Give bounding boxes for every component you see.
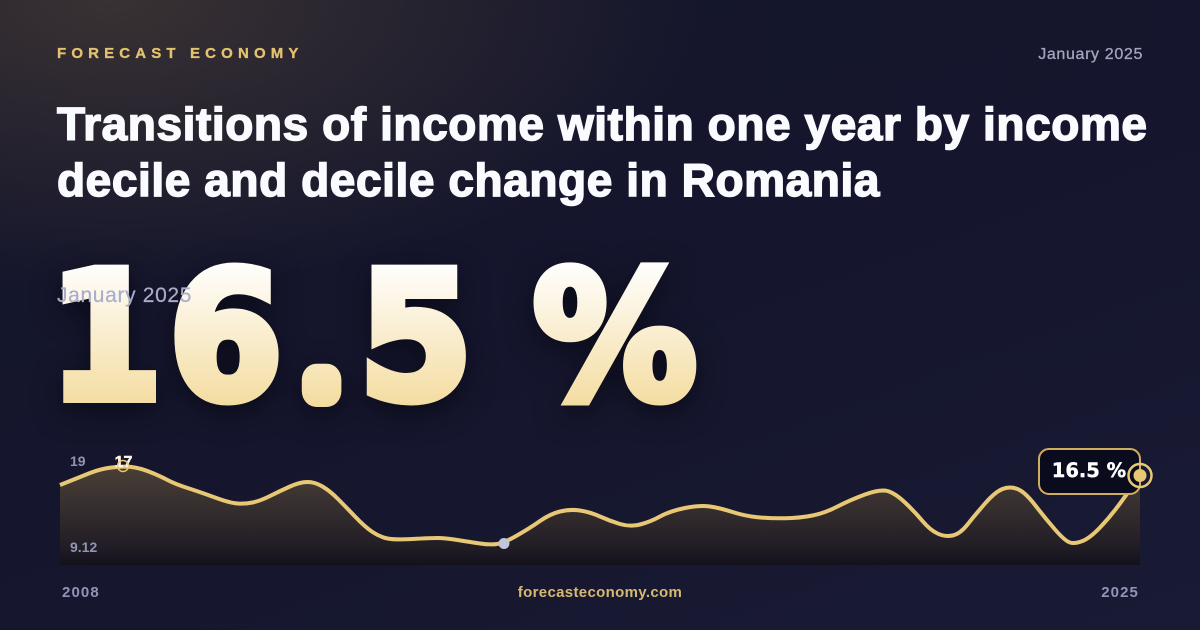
title: decile and decile change in Romania	[57, 154, 880, 206]
chart area fill	[60, 467, 1140, 565]
x axis end year: 2025	[1101, 584, 1139, 601]
end point marker	[1128, 464, 1152, 487]
big value: .	[311, 335, 332, 405]
title: Transitions of income within one year by income	[57, 98, 1148, 150]
callout: latest value: 16.5 %	[1052, 459, 1126, 482]
minimum marker	[498, 538, 510, 549]
y axis min label: 9.12	[70, 539, 97, 555]
source site: forecasteconomy.com	[518, 584, 682, 601]
brand heading: FORECAST ECONOMY	[57, 45, 304, 62]
x axis start year: 2008	[62, 584, 100, 601]
y axis max label: 19	[70, 453, 86, 469]
big value: %	[465, 235, 697, 440]
title	[56, 98, 1148, 206]
big value	[49, 235, 699, 440]
peak value label: 17	[115, 454, 132, 471]
big value: 16	[49, 235, 283, 440]
callout: latest value	[1039, 449, 1140, 494]
big value: 5	[359, 235, 473, 440]
date top right: January 2025	[1038, 46, 1143, 63]
peak marker	[118, 460, 128, 472]
subtitle date overlapping value: January 2025	[57, 284, 192, 307]
chart line	[60, 467, 1140, 544]
